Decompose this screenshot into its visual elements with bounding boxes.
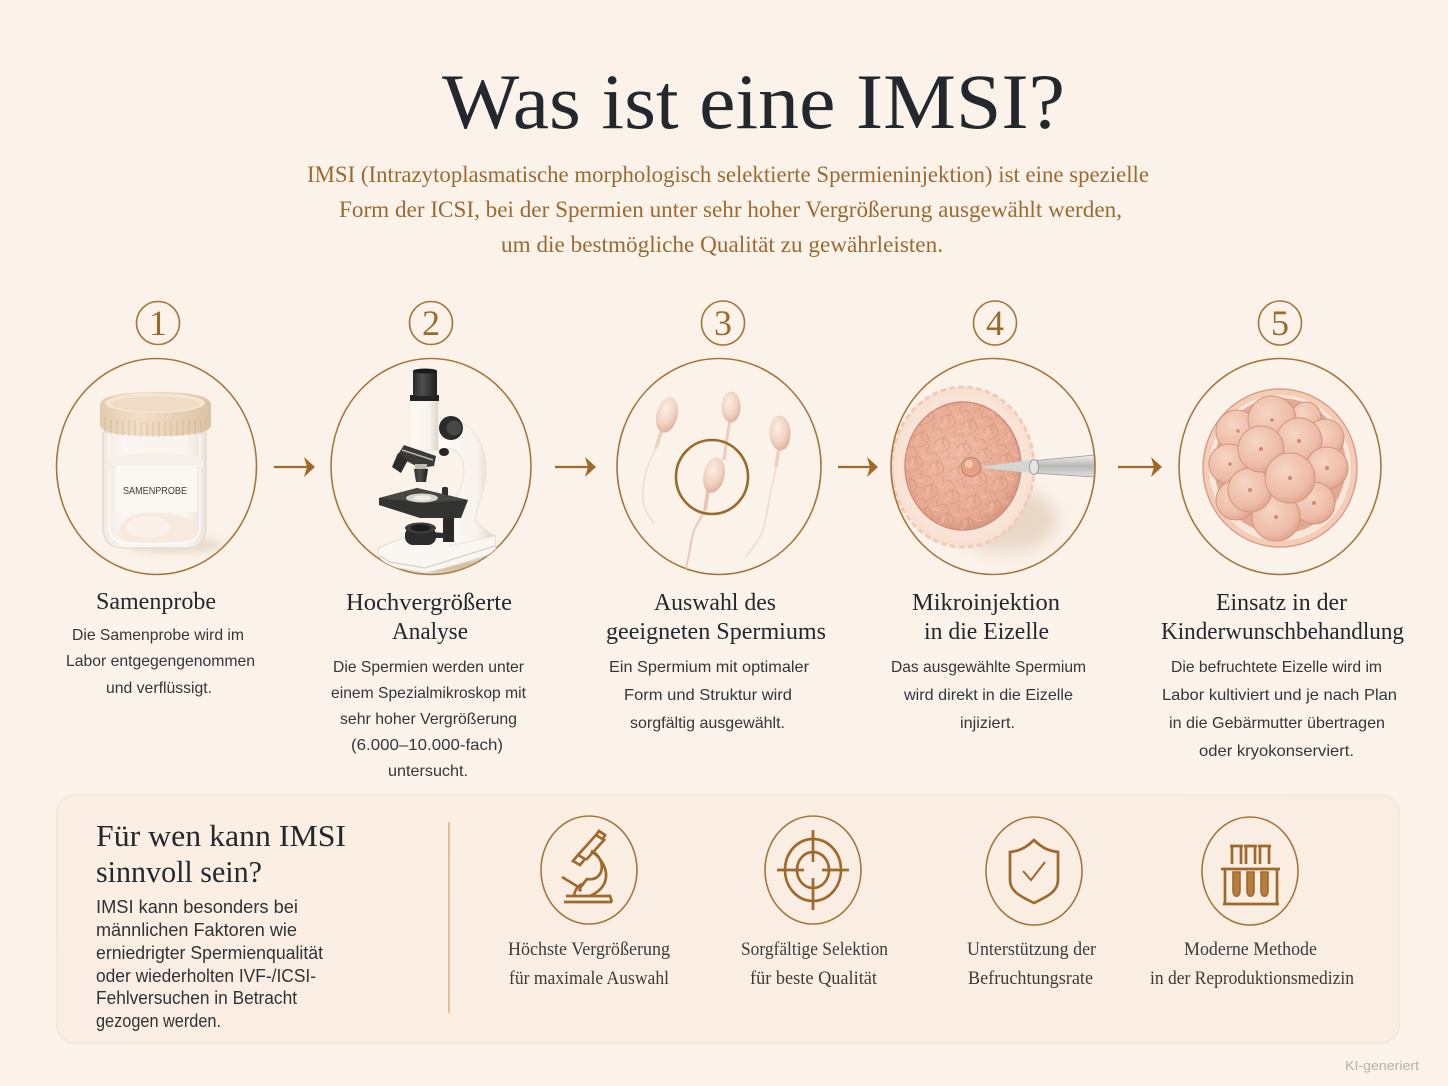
description (609, 659, 810, 732)
heading: in die Eizelle (924, 619, 1049, 645)
description: Ein Spermium mit optimaler (609, 659, 810, 676)
description: injiziert. (960, 715, 1015, 732)
caption: Höchste Vergrößerung (508, 939, 670, 960)
description: Labor kultiviert und je nach Plan (1162, 687, 1397, 704)
caption: für beste Qualität (750, 968, 878, 989)
icon: target crosshair (765, 816, 861, 924)
panel text: IMSI kann besonders bei (96, 897, 298, 917)
heading: Kinderwunschbehandlung (1161, 619, 1404, 645)
caption: Sorgfältige Selektion (741, 939, 888, 960)
heading (346, 590, 512, 645)
heading: geeigneten Spermiums (606, 619, 826, 645)
illustration: embryo (1179, 358, 1381, 574)
description (1162, 659, 1397, 760)
number badge 5 (1258, 301, 1302, 345)
illustration: sample jar: SAMENPROBE (123, 486, 187, 497)
description: in die Gebärmutter übertragen (1169, 715, 1385, 732)
heading (1161, 590, 1404, 645)
arrow 4 to 5 (1118, 457, 1162, 477)
caption: Unterstützung der (967, 939, 1097, 960)
subtitle text block: um die bestmögliche Qualität zu gewährleisten. (501, 232, 943, 257)
heading: Analyse (392, 619, 468, 645)
caption: in der Reproduktionsmedizin (1150, 968, 1354, 989)
panel heading (96, 818, 346, 889)
panel: Für wen kann IMSI sinnvoll sein (57, 795, 1399, 1043)
description: Das ausgewählte Spermium (891, 659, 1086, 676)
number badge 3 (702, 301, 744, 345)
description: Labor entgegengenommen (66, 653, 255, 670)
number badge 2 (410, 302, 452, 344)
arrow 1 to 2 (274, 457, 315, 477)
caption (508, 939, 670, 989)
caption: Moderne Methode (1184, 939, 1317, 960)
caption: für maximale Auswahl (509, 968, 669, 989)
panel text: oder wiederholten IVF-/ICSI- (96, 966, 316, 986)
watermark: KI-generiert (1345, 1058, 1419, 1073)
description: Die befruchtete Eizelle wird im (1171, 659, 1382, 676)
description (66, 627, 255, 697)
number badge 2: 2 (422, 303, 440, 343)
icon: microscope (541, 816, 637, 924)
subtitle text block: IMSI (Intrazytoplasmatische morphologisch selektierte Spermieninjektion) ist eine spezielle (307, 162, 1149, 187)
description: Form und Struktur wird (624, 687, 792, 704)
description: oder kryokonserviert. (1199, 743, 1354, 760)
caption (967, 939, 1097, 989)
panel text: erniedrigter Spermienqualität (96, 943, 323, 963)
panel heading: Für wen kann IMSI (96, 818, 346, 853)
illustration: egg microinjection (891, 358, 1095, 574)
heading: Mikroinjektion (912, 590, 1060, 616)
subtitle text block: Form der ICSI, bei der Spermien unter sehr hoher Vergrößerung ausgewählt werden, (339, 197, 1122, 222)
description: Die Samenprobe wird im (72, 627, 244, 644)
panel text: männlichen Faktoren wie (96, 920, 297, 940)
heading: Hochvergrößerte (346, 590, 512, 616)
panel text: gezogen werden. (96, 1011, 221, 1031)
subtitle text block (307, 162, 1149, 257)
arrow 3 to 4 (838, 457, 878, 477)
description (331, 659, 527, 780)
panel heading: sinnvoll sein? (96, 854, 262, 889)
benefit: selection (741, 816, 888, 989)
description: sehr hoher Vergrößerung (340, 711, 517, 728)
number badge 3: 3 (714, 303, 732, 343)
number badge 5: 5 (1271, 303, 1289, 343)
description: Die Spermien werden unter (333, 659, 525, 676)
heading: Samenprobe (96, 589, 216, 615)
heading: Einsatz in der (1216, 590, 1347, 616)
step 4: Mikroinjektion (891, 301, 1095, 732)
description: untersucht. (388, 763, 468, 780)
step 2: Hochvergrößerte Analyse (331, 302, 531, 780)
description: und verflüssigt. (106, 680, 212, 697)
number badge 1: 1 (149, 303, 167, 343)
description: sorgfältig ausgewählt. (630, 715, 785, 732)
heading (606, 590, 826, 645)
step 5: Einsatz in der Kinderwunschbehandlung (1161, 301, 1404, 760)
number badge 1 (136, 302, 180, 344)
number badge 4 (974, 301, 1016, 345)
caption (1150, 939, 1354, 989)
heading (912, 590, 1060, 645)
illustration: microscope (331, 358, 531, 574)
icon: shield check (986, 817, 1082, 925)
illustration: sperm selection (617, 358, 821, 576)
panel text: Fehlversuchen in Betracht (96, 988, 297, 1008)
benefit: modern method (1150, 817, 1354, 989)
caption (741, 939, 888, 989)
step 3: Auswahl des geeigneten Spermiums (606, 301, 826, 732)
step 1: Samenprobe (56, 302, 256, 697)
number badge 4: 4 (986, 303, 1004, 343)
heading: Auswahl des (654, 590, 776, 616)
description: wird direkt in die Eizelle (903, 687, 1073, 704)
description: einem Spezialmikroskop mit (331, 685, 527, 702)
arrow 2 to 3 (555, 457, 596, 477)
title: Was ist eine IMSI? (442, 58, 1065, 145)
caption: Befruchtungsrate (968, 968, 1093, 989)
benefit: fertilisation rate (967, 817, 1097, 989)
panel text (96, 897, 323, 1031)
benefit: magnification (508, 816, 670, 989)
description: (6.000–10.000-fach) (351, 737, 503, 754)
illustration: sample jar (56, 358, 256, 574)
description (891, 659, 1086, 732)
icon: test tubes (1202, 817, 1298, 925)
